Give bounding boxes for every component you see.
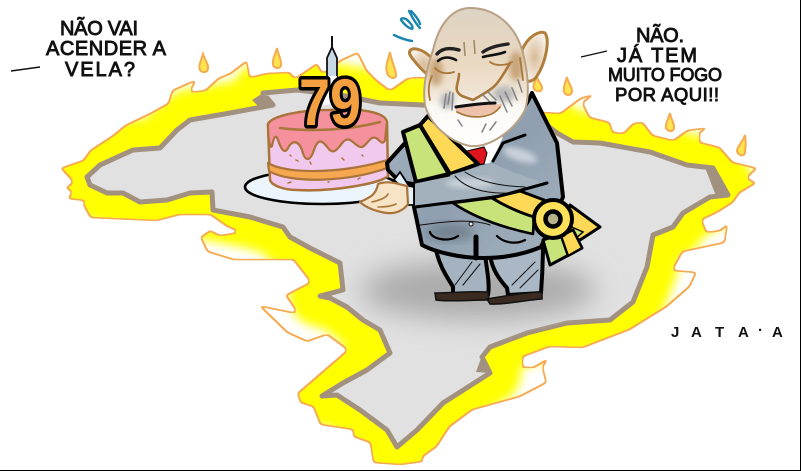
upper sash [403,116,478,182]
number 79: 79 [299,65,361,139]
right ear [522,32,547,81]
president figure [360,8,600,304]
shirt cuff [394,172,414,205]
flames around the map [62,52,756,466]
left ear [410,49,438,80]
lapel [493,135,525,161]
skin shading [429,58,443,86]
suit jacket [387,93,563,258]
artist signature: A [772,324,783,341]
face features [429,40,523,132]
forearm across chest [415,163,547,207]
map of Brazil [87,90,728,447]
speech left: VELA? [65,59,135,81]
shadow beneath the figure [360,260,596,320]
facial creases [457,63,510,100]
speech right: JÁ TEM [617,44,697,67]
mouth [455,104,503,116]
eyes [438,52,505,61]
artist signature: · [758,322,763,339]
speech left: ACENDER A [46,38,167,60]
artist signature: T [715,324,724,341]
lower sash [453,191,544,234]
speech right [581,23,722,105]
speech left: NÃO VAI [60,16,138,40]
plate [245,170,399,204]
eyebrows [437,44,508,54]
artist signature [671,322,783,341]
artist signature: A [738,324,749,341]
rosette with ribbon tails [534,200,600,265]
beard shading [440,93,454,109]
flame droplets [199,48,746,155]
shoes [435,292,542,304]
legs [436,243,543,295]
collar and shirt [457,137,503,165]
birthday cake on plate [245,36,399,204]
head [424,8,528,146]
necktie [467,147,487,165]
speech left [11,16,167,81]
speech right: POR AQUI!! [615,84,719,105]
speech right: MUITO FOGO [608,65,722,85]
speech right: NÃO. [636,23,684,47]
candle [318,36,337,106]
beard [444,80,522,132]
cake body [268,110,388,190]
artist signature: J [671,324,679,341]
sweat marks [394,11,420,41]
hand [360,182,408,213]
artist signature: A [691,324,702,341]
